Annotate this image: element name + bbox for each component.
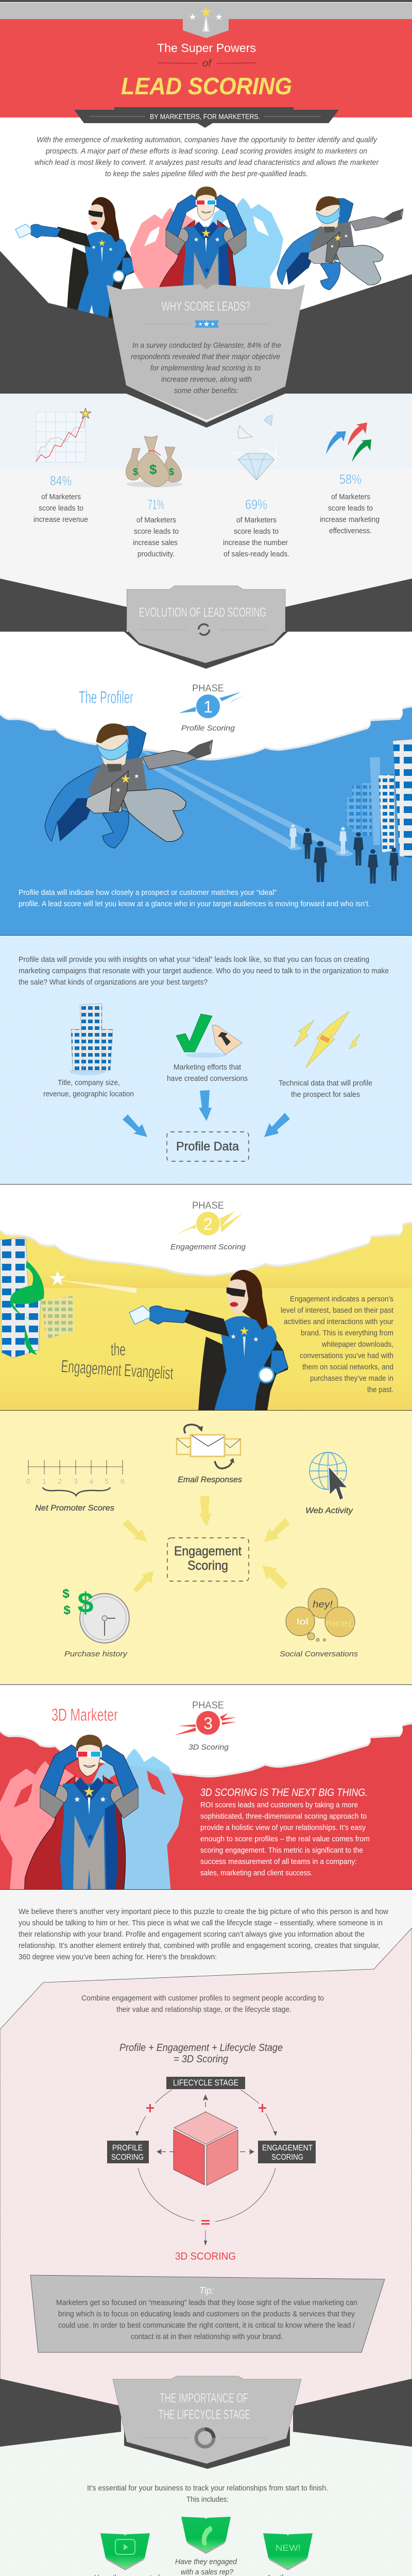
icon: clock and dollars: $ [62,1587,70,1601]
engagement description: brand. This is everything from [301,1329,393,1337]
stat: 58% [320,422,380,535]
engagement scoring panel: Net Promoter Scores [35,1504,114,1513]
icon: money bags [126,436,183,487]
cloud edge and red band [0,1722,412,1890]
shield: demo [94,2533,160,2576]
stat: 58%: score leads to [328,504,373,513]
survey text: for implementing lead scoring is to [150,364,261,372]
phase number [175,1700,236,1752]
intro text: to keep the sales pipeline filled with the best pre-qualified leads. [105,170,308,178]
stat: 84%: increase revenue [33,515,88,524]
tip box: bring which is to focus on educating leads and customers on the products & services that they [58,2310,355,2318]
engagement scoring box: Engagement [174,1544,242,1558]
panel text: marketing campaigns that resonate with your target audience. Who do you need to talk to in the organization to make [19,967,389,975]
stat: 71%: increase sales [133,538,178,547]
lifecycle intro panel: their relationship with your brand. Profile and engagement scoring can’t always give you information about the [19,1930,365,1939]
phase 2 section [0,1184,412,1411]
engagement description: Engagement indicates a person’s [290,1295,393,1303]
dark wedge: importance [0,2379,412,2447]
engagement scoring box [167,1538,249,1581]
lifecycle intro panel: relationship. It’s another element entirely that, combined with profile and engagement scoring, creates that singular, [19,1941,380,1950]
formula: = 3D Scoring [174,2054,228,2065]
intro text: prospects. A major part of these efforts is lead scoring. Lead scoring provides insight to marketers on [45,147,367,156]
stat: 69%: of sales-ready leads. [224,550,289,558]
stat: 69%: of Marketers [236,516,277,524]
cube [174,2112,238,2185]
icon: thought clouds [286,1588,355,1641]
captions [43,1063,372,1099]
phase number: 3D Scoring [188,1743,229,1752]
formula [119,2042,283,2065]
buildings with tentacle [0,1238,74,1358]
phase number: Profile Scoring [181,724,235,733]
tracking intro text: It’s essential for your business to track your relationships from start to finish. [87,2484,328,2493]
captions: Title, company size, [58,1078,120,1087]
stat: 84%: score leads to [39,504,83,513]
engagement description [281,1295,394,1394]
lifecycle stage label: LIFECYCLE STAGE [173,2078,238,2088]
icon: phone [202,2526,212,2546]
stats section background [0,394,412,632]
plus and equals [146,2104,266,2225]
lifecycle intro panel: 360 degree view you’ve been aching for. Here’s the breakdown: [19,1953,217,1961]
ribbon [74,107,339,128]
result label: 3D SCORING [175,2251,236,2262]
segment text: Combine engagement with customer profiles to segment people according to [81,1994,324,2003]
stat: 71%: 71% [148,497,164,512]
tip box: Tip: [199,2285,214,2296]
segment text [81,1994,324,2014]
number scale [26,1460,125,1496]
intro text [35,135,379,178]
phase number: PHASE [192,1200,224,1211]
shield: evolution of lead scoring: EVOLUTION OF LEAD SCORING [139,605,266,620]
hero trio [15,187,403,349]
hero: 3D marketer with ghosts [130,187,283,349]
phase number [179,683,243,733]
stat: 69%: 69% [245,497,267,512]
dark separator [0,1684,412,1685]
lifecycle intro panel [0,1890,412,2044]
number scale: 1 [42,1477,46,1485]
engagement scoring panel: Web Activity [305,1506,353,1515]
tracking intro text: This includes: [186,2495,229,2504]
beams [126,747,353,856]
title line 1: The Super Powers [157,41,256,55]
profile description: Profile data will indicate how closely a prospect or customer matches your “ideal” [19,888,277,897]
engagement description: level of interest, based on their past [281,1306,394,1315]
heading: engagement evangelist [60,1340,174,1383]
shield: importance of the lifecycle stage: THE LIFECYCLE STAGE [159,2408,250,2422]
icon: clock and dollars: $ [63,1603,71,1617]
buildings [347,739,412,858]
survey text [131,341,281,395]
icon: burst [50,1270,65,1285]
beam [52,1279,136,1293]
stat: 58%: effectiveness. [329,527,372,535]
tip box [30,2275,385,2352]
icon: thought clouds: nice(; [325,1618,355,1628]
stat: 58%: increase marketing [320,515,380,524]
dark backdrop [0,251,412,394]
pink panel [0,1928,412,2447]
stat: 69%: increase the number [223,538,288,547]
arrows [123,1090,290,1137]
3D scoring description: scoring engagement. This metric is significant to the [200,1846,363,1855]
engagement scoring panel: Social Conversations [280,1650,358,1658]
icon: ring [142,2429,268,2447]
tip box: contact is at in their relationship with your brand. [131,2332,283,2341]
icon: globe and cursor [310,1452,348,1500]
3D scoring description: sophisticated, three-dimensional scoring approach to [200,1812,367,1821]
icon: clock and dollars: $ [77,1586,94,1619]
curves and arrows [137,2090,276,2245]
shield: why score leads [107,284,305,428]
stat: 69%: score leads to [234,527,279,536]
3D scoring diagram [107,2077,316,2262]
icon: diamonds [232,415,282,480]
panel text: the sale? What kinds of organizations are your best targets? [19,978,208,987]
survey text: respondents revealed that their major objective [131,352,280,361]
stat: 71%: of Marketers [136,516,176,524]
shield: sales rep [175,2517,237,2576]
shield: new [263,2533,313,2576]
hero: the profiler [277,196,403,290]
engagement description: conversations you’ve had with [300,1351,393,1360]
engagement scoring panel [0,1411,412,1684]
heading: WHY SCORE LEADS? [162,299,250,314]
title of: of [202,58,212,69]
hero: 3D marketer [0,1735,183,1889]
stat: 71%: score leads to [134,527,179,536]
lifecycle stage label [166,2077,245,2089]
survey text: In a survey conducted by Gleanster, 84% of the [132,341,281,350]
tip box: Marketers get so focused on “measuring” leads that they loose sight of the value marketing can [56,2298,357,2307]
cloud edge and blue band [0,705,412,936]
profile data panel [0,936,412,1184]
icon: rising chart [36,408,91,462]
engagement description: the past. [367,1385,393,1394]
survey text: some other benefits: [174,386,238,395]
phase number: 3 [203,1714,213,1733]
engagement description: purchases they’ve made in [310,1374,393,1383]
hero: evangelist [129,1269,288,1410]
shield: new: NEW! [276,2543,301,2553]
engagement scoring label: SCORING [271,2153,303,2162]
icon: office buildings [70,1004,113,1075]
title lead scoring: LEAD SCORING [121,73,292,99]
phase number: 1 [203,698,213,716]
stat: 58%: of Marketers [331,493,370,501]
stat: 84% [33,408,91,524]
stars badge [143,320,269,328]
phase number: PHASE [192,1700,224,1711]
dark wedge: evolution [0,579,412,632]
icon: money bags: $ [133,467,138,477]
number scale: 5 [105,1477,109,1485]
people silhouettes [289,824,399,884]
profile description [19,888,370,908]
icon: emails [177,1425,241,1468]
number scale: 6 [121,1477,125,1485]
stat: 84%: of Marketers [41,493,81,501]
yellow arrows [123,1496,290,1593]
captions: Technical data that will profile [279,1079,372,1088]
stat: 58%: 58% [339,471,362,487]
tracking intro text [87,2484,328,2504]
captions: Marketing efforts that [174,1063,242,1072]
hero: engagement evangelist [15,197,135,340]
badge with stars [183,7,229,38]
lifecycle intro panel: you should be talking to him or her. This piece is what we call the lifecycle stage – essentially, where someone is in [19,1919,383,1927]
heading: 3D Marketer: 3D Marketer [52,1705,118,1725]
heading: engagement evangelist: the [111,1340,126,1360]
stat: 71%: productivity. [138,550,175,558]
stat: 84%: 84% [50,473,72,488]
engagement scoring panel: Purchase history [64,1650,128,1658]
shield: sales rep: Have they engaged [175,2557,237,2566]
3D scoring description: success measurement of all teams in a company: [200,1857,357,1866]
3D scoring description: provide a holistic view of your relationships. It’s easy [200,1823,366,1832]
phase 3 section [0,1684,412,1890]
shield: importance of the lifecycle stage [113,2376,301,2469]
engagement scoring box: Scoring [187,1558,228,1573]
segment text: their value and relationship stage, or the lifecycle stage. [116,2005,291,2014]
hero: profiler flying [45,723,213,848]
phase number: PHASE [192,683,224,694]
profile scoring label: SCORING [111,2153,144,2162]
heading: The Profiler: The Profiler [79,688,133,707]
dark separator [0,1184,412,1185]
phase number: Engagement Scoring [170,1243,246,1251]
profile data box: Profile Data [176,1140,239,1154]
captions: the prospect for sales [291,1090,360,1099]
intro text: which lead is most likely to convert. It analyzes past results and lead characteristics and allows the marketer [35,158,379,167]
number scale: 4 [89,1477,93,1485]
number scale: 2 [58,1477,62,1485]
intro text: With the emergence of marketing automation, companies have the opportunity to better identify and qualify [37,135,377,144]
icon: check and tag [176,1014,242,1058]
icon: clock and dollars [62,1586,129,1643]
3D scoring description [200,1787,370,1877]
formula: Profile + Engagement + Lifecycle Stage [119,2042,283,2054]
phase number [170,1200,246,1251]
number scale: 3 [74,1477,78,1485]
profile description: profile. A lead score will let you know at a glance who in your target audiences is moving forward and who isn’t. [19,900,370,908]
engagement description: whitepaper downloads, [321,1340,393,1349]
number scale: 0 [26,1477,30,1485]
phase number: 2 [203,1215,213,1233]
profile data box [167,1132,249,1161]
icon: money bags: $ [149,462,157,477]
engagement scoring panel: Email Responses [178,1476,242,1484]
captions: revenue, geographic location [43,1090,134,1098]
phase 1 section [0,683,412,936]
3D scoring description: sales, marketing and client success. [200,1869,313,1877]
shield: importance of the lifecycle stage: THE IMPORTANCE OF [160,2391,248,2405]
header band [0,0,412,128]
profile scoring label [107,2141,149,2163]
engagement scoring label: ENGAGEMENT [262,2144,313,2153]
3D scoring description: enough to score profiles – the real value comes from [200,1835,370,1843]
stat: 71% [126,436,183,558]
shield: evolution of lead scoring [124,586,288,669]
tip box: could use. In order to best communicate the right content, it is critical to know where the lead / [58,2321,355,2330]
icon: cycle arrows [141,624,267,635]
3D scoring description: ROI scores leads and customers by taking a more [200,1801,358,1809]
icon: thought clouds: lol [297,1617,308,1626]
stat: 69% [223,415,289,558]
panel text: Profile data will provide you with insights on what your “ideal” leads look like, so that you can focus on creating [19,955,369,964]
ribbon: BY MARKETERS, FOR MARKETERS. [150,112,260,121]
lifecycle intro panel: We believe there’s another very important piece to this puzzle to create the big picture of who this person is and how [19,1907,388,1916]
3D scoring description: 3D SCORING IS THE NEXT BIG THING. [200,1787,368,1799]
survey text: increase revenue, along with [161,375,252,384]
green panel [0,2432,412,2576]
captions: have created conversions [167,1074,248,1083]
panel text [19,955,389,987]
icon: thought clouds: hey! [313,1599,333,1609]
icon: money bags: $ [169,467,174,477]
engagement description: activities and interactions with your [284,1317,393,1326]
engagement scoring label [258,2141,316,2163]
icon: three arrows [326,422,371,462]
engagement description: them on social networks, and [302,1363,393,1371]
heading: engagement evangelist: Engagement Evangelist [60,1357,174,1383]
icon: play [115,2539,135,2554]
icon: lightning bolts [294,1011,360,1067]
profile scoring label: PROFILE [112,2144,143,2153]
cloud edge and yellow band [0,1222,412,1411]
